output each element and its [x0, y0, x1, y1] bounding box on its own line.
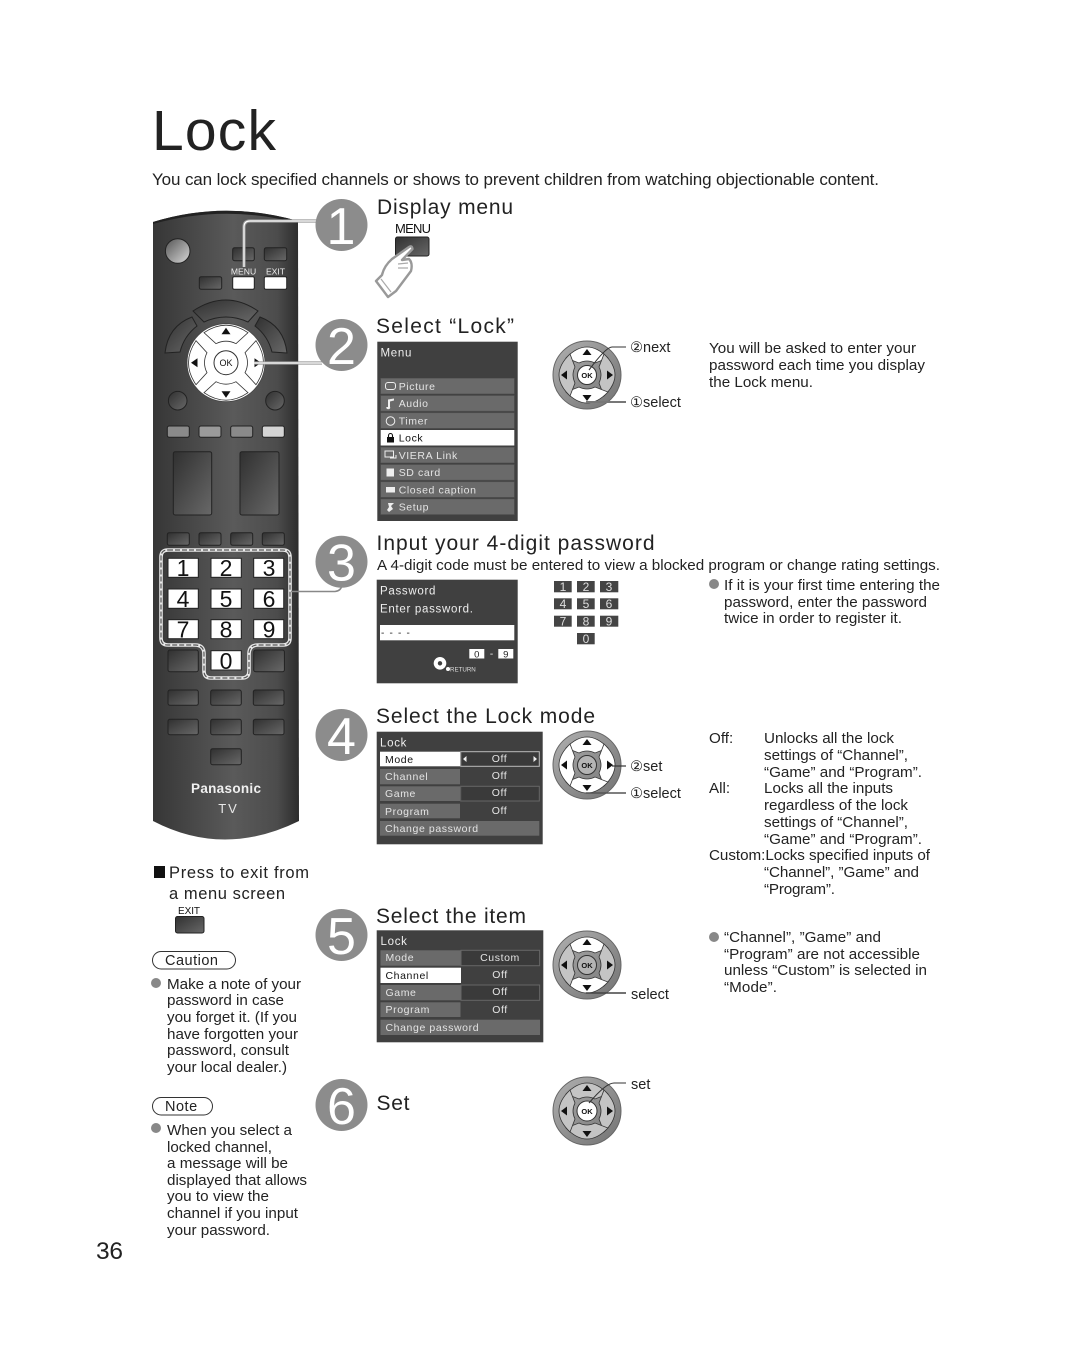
power button: [165, 239, 190, 263]
note: first time: twice in order to register it.: [724, 610, 902, 627]
note: first time: [709, 577, 940, 627]
transport buttons: [167, 533, 284, 545]
note text: When you select a: [167, 1122, 293, 1139]
step number 4: [316, 708, 368, 766]
password screen panel: Password: [380, 586, 436, 598]
callout: set and select: [586, 759, 681, 802]
icon: menu button with hand: [376, 221, 431, 297]
callout: set and select: ①select: [630, 786, 681, 802]
remote body: [153, 211, 299, 839]
keypad digits: 2: [583, 580, 590, 594]
heading: select lock mode: Select the Lock mode: [376, 705, 595, 728]
press to exit note: a menu screen: [169, 885, 285, 903]
mode definitions: “Channel”, ”Game” and: [764, 864, 919, 881]
step number 5: [316, 908, 368, 966]
step number 2: [316, 318, 368, 376]
item screen panel: [377, 930, 543, 1042]
keypad digits: 9: [606, 614, 613, 628]
press to exit note: [154, 864, 309, 903]
MENU and EXIT labels: MENU: [231, 266, 256, 276]
mode definitions: Off:: [709, 730, 733, 747]
buttons beside zero: [168, 650, 284, 672]
menu screen panel: VIERA Link: [399, 450, 458, 462]
icon: menu button with hand: MENU: [395, 221, 431, 236]
description: password: A 4-digit code must be entered to view a blocked program or change rating settings.: [377, 557, 940, 574]
password screen panel: - - - -: [381, 628, 411, 639]
note text: locked channel,: [167, 1139, 272, 1156]
keypad digits: 1: [560, 580, 567, 594]
callout: select: select: [631, 987, 669, 1003]
press to exit note: Press to exit from: [169, 864, 309, 882]
password screen panel: -: [490, 649, 493, 660]
note: custom: [709, 929, 927, 996]
navigation pad: step 5: [553, 931, 621, 999]
note: enter password: [709, 340, 925, 391]
title: Lock: [152, 99, 276, 163]
number keypad: 2: [220, 555, 232, 581]
step number 5: 5: [327, 908, 356, 966]
password screen panel: RETURN: [450, 666, 476, 674]
password screen panel: [377, 580, 518, 683]
number keypad: 9: [263, 616, 275, 642]
password screen panel: 9: [503, 650, 508, 660]
menu screen panel: [377, 342, 518, 521]
dashed keypad outline: [161, 550, 290, 678]
mode definitions: “Game” and “Program”.: [764, 764, 922, 781]
step number 2: 2: [327, 318, 356, 376]
item screen panel: Change password: [386, 1022, 479, 1034]
navigation pad: step 2: OK: [581, 371, 593, 380]
lock mode screen panel: Channel: [385, 771, 428, 783]
arc buttons: [165, 300, 287, 353]
keypad digits: 6: [606, 597, 613, 611]
password screen panel: Enter password.: [380, 603, 474, 615]
note: custom: “Channel”, ”Game” and: [724, 929, 881, 946]
heading: display menu: Display menu: [377, 196, 513, 219]
icon: exit button: [176, 906, 204, 933]
caution text: have forgotten your: [167, 1026, 298, 1043]
note: custom: “Program” are not accessible: [724, 946, 920, 963]
callout: select: [586, 987, 669, 1003]
note text: you to view the: [167, 1188, 269, 1205]
step number 1: 1: [327, 198, 355, 256]
callout: set: set: [631, 1077, 650, 1093]
menu screen panel: Closed caption: [399, 484, 477, 496]
note: enter password: the Lock menu.: [709, 374, 813, 391]
caution text: password in case: [167, 992, 284, 1009]
item screen panel: Off: [492, 969, 508, 981]
menu screen panel: Audio: [399, 398, 429, 410]
lower buttons: [168, 690, 284, 765]
lock mode screen panel: Off: [492, 753, 507, 765]
lock mode screen panel: Change password: [385, 823, 479, 835]
navigation pad: step 4: [553, 731, 621, 799]
mode definitions: regardless of the lock: [764, 797, 908, 814]
brand label: Panasonic: [191, 781, 261, 796]
note: enter password: password each time you display: [709, 357, 925, 374]
step number 3: 3: [327, 534, 356, 592]
item screen panel: Lock: [380, 936, 408, 948]
heading: input password: Input your 4-digit password: [376, 532, 654, 555]
callout: next and select: [586, 340, 681, 411]
note text: displayed that allows: [167, 1172, 307, 1189]
note text: channel if you input: [167, 1205, 299, 1222]
note label: Note: [165, 1099, 198, 1115]
step number 3: [316, 534, 368, 592]
intro text: You can lock specified channels or shows to prevent children from watching objectionable content.: [152, 170, 879, 189]
lock mode screen panel: Off: [492, 787, 507, 799]
step number 1: [316, 198, 368, 256]
step number 6: [316, 1078, 368, 1136]
caution label: [152, 952, 236, 969]
caution text: you forget it. (If you: [167, 1009, 297, 1026]
mode definitions: settings of “Channel”,: [764, 814, 908, 831]
number keypad: 4: [177, 586, 190, 612]
mode definitions: “Game” and “Program”.: [764, 831, 922, 848]
password screen panel: 0: [474, 650, 479, 660]
mode definitions: Unlocks all the lock: [764, 730, 894, 747]
lock mode screen panel: Lock: [380, 738, 407, 750]
item screen panel: Game: [386, 987, 416, 999]
item screen panel: Channel: [386, 970, 429, 982]
lock mode screen panel: Mode: [385, 754, 414, 766]
callout: set and select: ②set: [630, 759, 662, 775]
note text: your password.: [167, 1222, 270, 1239]
menu screen panel: Setup: [399, 502, 429, 514]
lock mode screen panel: Off: [492, 770, 507, 782]
tall rocker buttons: [173, 452, 279, 515]
MENU and EXIT labels: [231, 266, 286, 276]
round buttons: [168, 391, 284, 410]
menu screen panel: Lock: [399, 432, 423, 444]
item screen panel: Custom: [480, 952, 520, 964]
note: first time: password, enter the password: [724, 594, 927, 611]
remote control: [153, 211, 299, 839]
keypad digits: 7: [560, 614, 567, 628]
top buttons: [199, 248, 287, 289]
item screen panel: Program: [386, 1004, 430, 1016]
keypad digits: 0: [583, 632, 590, 646]
navigation pad: step 4: OK: [581, 761, 593, 770]
keypad digits: 5: [583, 597, 590, 611]
note: enter password: You will be asked to enter your: [709, 340, 916, 357]
note text: [151, 1122, 307, 1239]
note: custom: unless “Custom” is selected in: [724, 962, 927, 979]
number keypad: 6: [263, 586, 275, 612]
menu screen panel: SD card: [399, 467, 441, 479]
TV label: TV: [218, 801, 239, 816]
mode definitions: “Program”.: [764, 881, 835, 898]
mode definitions: Locks all the inputs: [764, 780, 893, 797]
keypad digits: [554, 580, 618, 646]
number keypad: 3: [263, 555, 275, 581]
number keypad: 1: [177, 555, 189, 581]
step number 6: 6: [327, 1078, 356, 1136]
caution text: password, consult: [167, 1042, 290, 1059]
number keypad: 5: [220, 586, 232, 612]
heading: select the item: Select the item: [376, 905, 526, 928]
item screen panel: Off: [492, 1004, 508, 1016]
mode definitions: All:: [709, 780, 730, 797]
navigation pad: step 2: [553, 341, 621, 409]
menu screen panel: Menu: [380, 348, 412, 360]
item screen panel: Mode: [386, 952, 414, 964]
callout: next and select: ②next: [630, 340, 670, 356]
item screen panel: Off: [492, 986, 508, 998]
navigation pad: [187, 324, 265, 402]
menu screen panel: Timer: [399, 415, 428, 427]
lock mode screen panel: Game: [385, 788, 416, 800]
number keypad: 7: [177, 616, 189, 642]
icon: exit button: EXIT: [178, 906, 200, 917]
connector lines: [244, 221, 342, 592]
MENU and EXIT labels: EXIT: [266, 266, 286, 276]
note: first time: If it is your first time entering the: [724, 577, 940, 594]
navigation pad: step 6: OK: [581, 1107, 593, 1116]
keypad digits: 3: [606, 580, 613, 594]
heading: select lock: Select “Lock”: [376, 315, 514, 338]
lock mode screen panel: Off: [492, 805, 507, 817]
colour buttons: [167, 426, 284, 437]
mode definitions: Custom:Locks specified inputs of: [709, 847, 931, 864]
note label: [152, 1098, 212, 1115]
callout: set: [589, 1077, 650, 1103]
navigation pad: step 6: [553, 1077, 621, 1145]
lock mode screen panel: Program: [385, 806, 429, 818]
mode definitions: settings of “Channel”,: [764, 747, 908, 764]
number keypad: 0: [220, 648, 232, 674]
menu screen panel: Picture: [399, 381, 436, 393]
page number: 36: [96, 1238, 123, 1265]
caution label: Caution: [165, 953, 218, 969]
keypad digits: 4: [560, 597, 567, 611]
number keypad: 8: [220, 616, 232, 642]
lock mode screen panel: [377, 732, 543, 844]
keypad digits: 8: [583, 614, 590, 628]
caution text: [151, 976, 301, 1076]
note: custom: “Mode”.: [724, 979, 777, 996]
navigation pad: OK: [219, 358, 233, 368]
mode definitions: [709, 730, 931, 898]
step number 4: 4: [327, 708, 356, 766]
callout: next and select: ①select: [630, 395, 681, 411]
note text: a message will be: [167, 1155, 288, 1172]
number keypad: [168, 555, 284, 674]
heading: set: Set: [376, 1092, 410, 1115]
navigation pad: step 5: OK: [581, 961, 593, 970]
menu icons: [385, 382, 396, 512]
caution text: your local dealer.): [167, 1059, 287, 1076]
caution text: Make a note of your: [167, 976, 301, 993]
